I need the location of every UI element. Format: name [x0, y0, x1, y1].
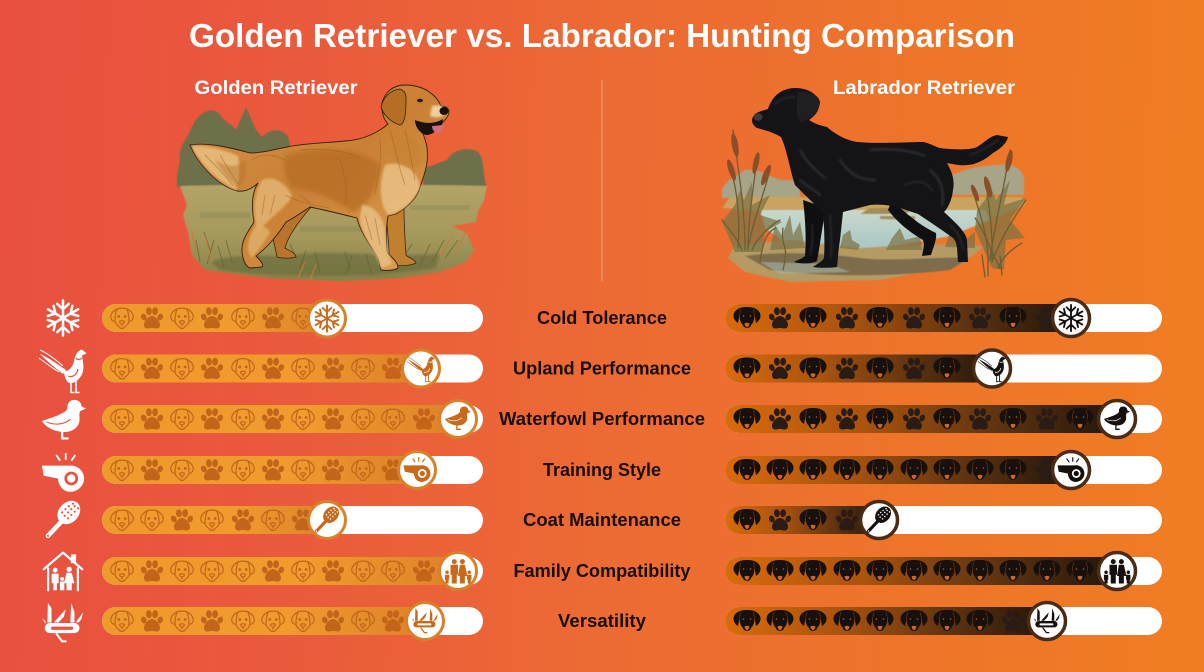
golden bar	[102, 552, 483, 590]
mouth and nose	[415, 119, 443, 135]
icon: whistle	[42, 454, 84, 492]
shading and fur	[284, 150, 380, 212]
icon: brush	[47, 496, 85, 537]
icon: duck	[42, 400, 86, 438]
label: Coat Maintenance: Coat Maintenance	[523, 509, 681, 530]
golden bar	[102, 400, 483, 438]
row: Training Style	[42, 452, 1162, 492]
body	[752, 88, 1008, 268]
label: Waterfowl Performance: Waterfowl Performance	[499, 408, 705, 429]
labrador bar	[725, 452, 1162, 488]
illustration: black labrador in a marsh	[722, 88, 1026, 282]
icon: multi-tool knife	[42, 603, 83, 641]
reeds and cattails	[722, 180, 1026, 270]
labrador bar	[725, 602, 1162, 640]
icon: family house	[44, 553, 82, 590]
illustration: golden retriever in a field	[177, 85, 487, 281]
body	[190, 85, 449, 270]
row: Family Compatibility	[44, 552, 1162, 590]
label: Versatility: Versatility	[558, 610, 647, 631]
labrador bar	[725, 350, 1162, 387]
row: Waterfowl Performance	[42, 400, 1162, 438]
label: Training Style: Training Style	[543, 459, 661, 480]
icon: snowflake	[45, 300, 81, 336]
label: Family Compatibility: Family Compatibility	[514, 560, 691, 581]
labrador bar	[725, 552, 1162, 590]
heading: Labrador Retriever: Labrador Retriever	[833, 77, 1015, 99]
golden bar	[102, 452, 483, 488]
title: Golden Retriever vs. Labrador: Hunting Comparison	[189, 17, 1015, 54]
label: Cold Tolerance: Cold Tolerance	[537, 307, 667, 328]
golden bar	[102, 502, 483, 538]
row: Coat Maintenance	[47, 496, 1162, 538]
coat highlights	[775, 97, 998, 258]
row: Cold Tolerance	[45, 300, 1162, 337]
ear	[797, 92, 820, 122]
far legs	[268, 200, 312, 258]
label: Upland Performance: Upland Performance	[513, 358, 691, 378]
far legs	[794, 200, 826, 263]
ear	[381, 89, 406, 125]
icon: pheasant	[39, 350, 86, 392]
labrador bar	[725, 502, 1162, 538]
heading: Golden Retriever: Golden Retriever	[194, 77, 358, 99]
labrador bar	[725, 400, 1162, 438]
golden bar	[102, 602, 483, 640]
row: Upland Performance	[39, 350, 1162, 392]
row: Versatility	[42, 602, 1162, 641]
golden bar	[102, 350, 483, 387]
labrador bar	[725, 300, 1162, 336]
golden bar	[102, 300, 483, 337]
